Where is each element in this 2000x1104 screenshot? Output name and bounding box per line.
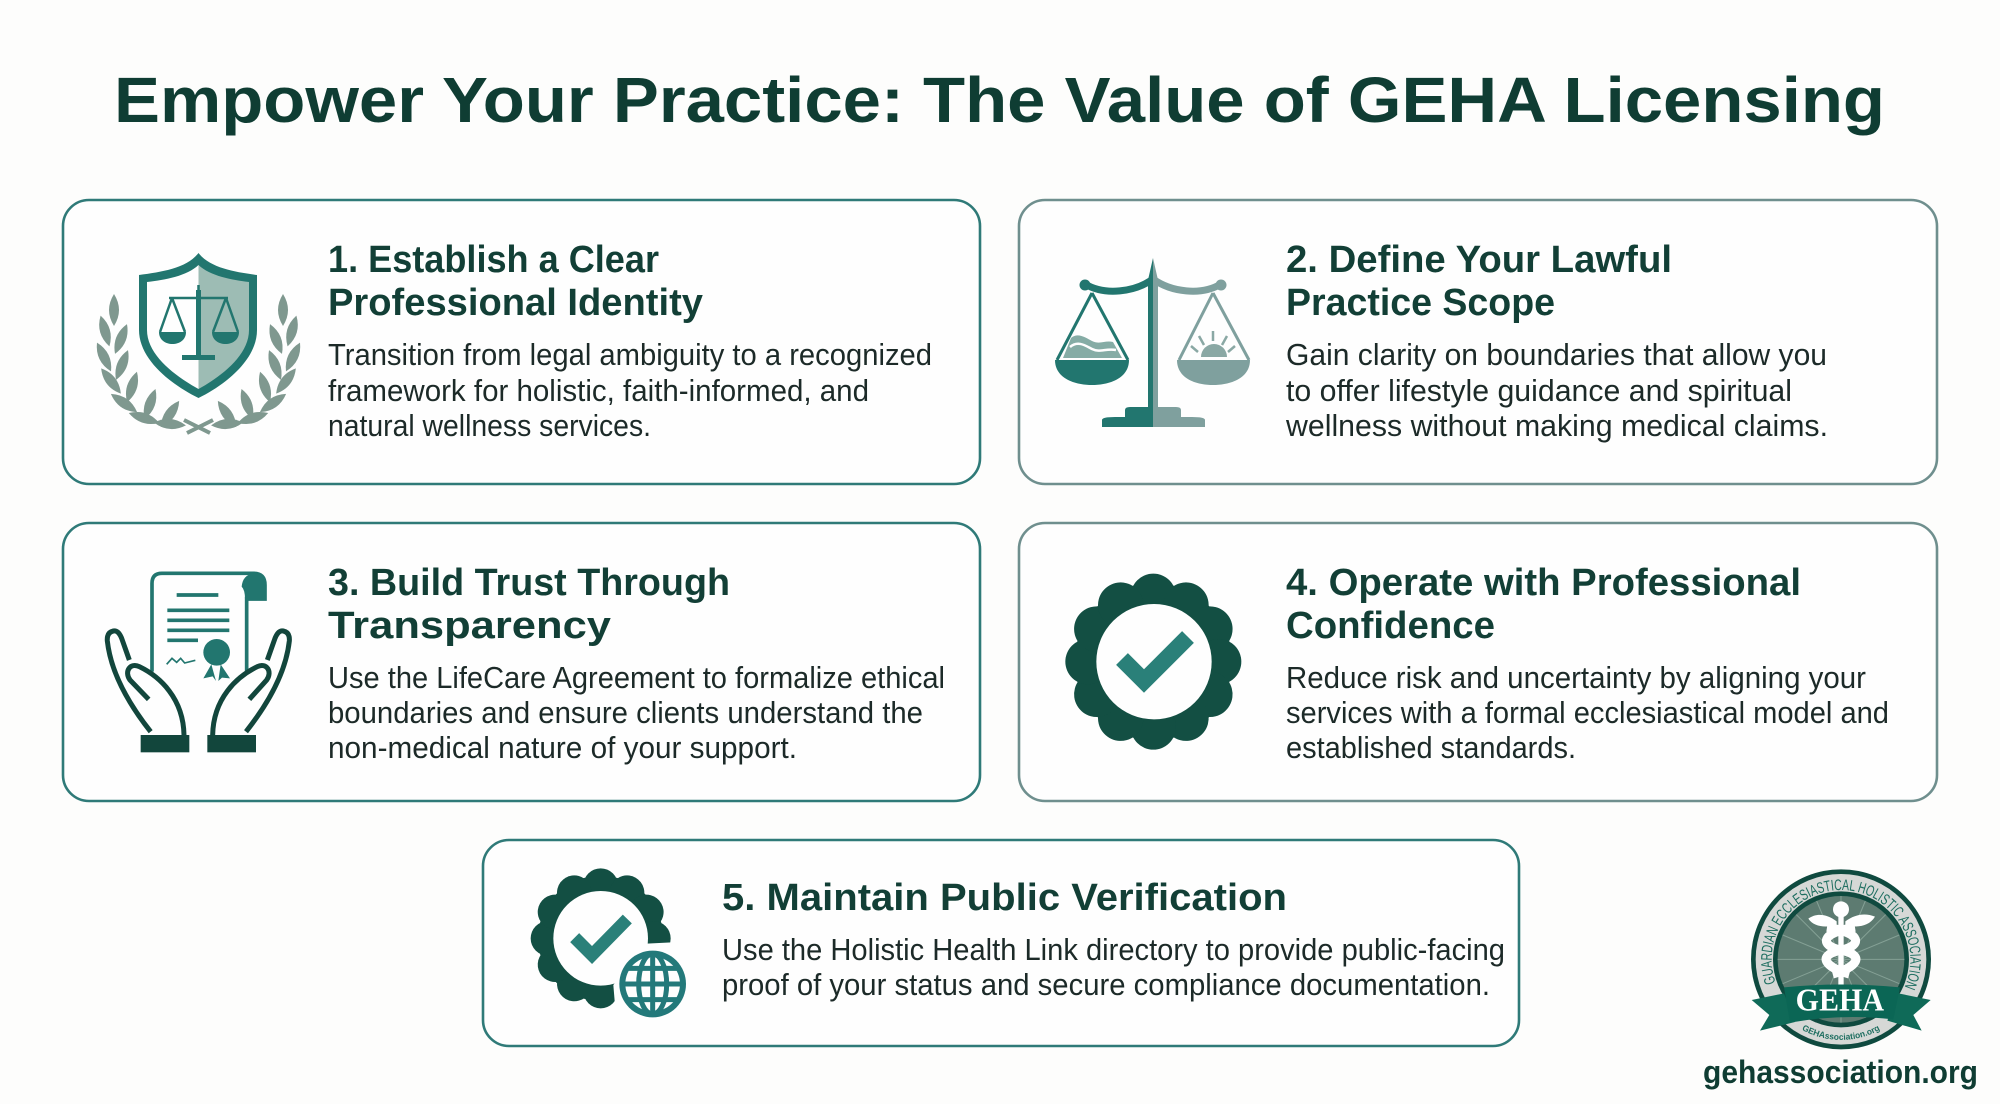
- body text: [1286, 660, 1889, 765]
- body text: natural wellness services.: [328, 408, 651, 443]
- body text: [1285, 337, 1828, 443]
- seal ribbon: [1752, 984, 1931, 1031]
- icon: gear check with globe: [531, 868, 687, 1025]
- logo: GEHA seal: [1751, 869, 1931, 1050]
- panel: 4. professional confidence: [1019, 523, 1937, 801]
- heading: 5. Maintain Public Verification: [722, 877, 1287, 919]
- heading: 3. Build Trust Through: [328, 562, 730, 604]
- seal wordmark: GEHA: [1796, 982, 1884, 1018]
- heading: [328, 239, 703, 324]
- body text: to offer lifestyle guidance and spiritual: [1286, 373, 1792, 408]
- heading: Confidence: [1286, 605, 1495, 647]
- website address: gehassociation.org: [1703, 1054, 1978, 1090]
- body text: Use the LifeCare Agreement to formalize ethical: [328, 660, 945, 695]
- icon: balance scales: [1055, 258, 1250, 427]
- heading: [1286, 562, 1801, 647]
- panel: 3. trust through transparency: [63, 523, 980, 801]
- body text: [722, 932, 1505, 1002]
- heading: [1286, 239, 1672, 324]
- title: Empower Your Practice: The Value of GEHA Licensing: [114, 64, 1885, 136]
- body text: wellness without making medical claims.: [1285, 408, 1828, 443]
- heading: Practice Scope: [1286, 282, 1555, 324]
- panel: 2. lawful practice scope: [1019, 200, 1937, 484]
- body text: non-medical nature of your support.: [328, 730, 797, 765]
- seal web address: GEHAssociation.org: [1802, 1025, 1880, 1040]
- body text: Gain clarity on boundaries that allow you: [1286, 337, 1827, 372]
- body text: [328, 337, 932, 443]
- heading: 1. Establish a Clear: [328, 239, 659, 281]
- panel: 5. public verification: [483, 840, 1519, 1046]
- icon: shield with scales and laurel: [92, 253, 305, 433]
- body text: Reduce risk and uncertainty by aligning your: [1286, 660, 1866, 695]
- body text: services with a formal ecclesiastical model and: [1286, 695, 1889, 730]
- body text: Use the Holistic Health Link directory to provide public-facing: [722, 932, 1505, 967]
- seal ring text: GUARDIAN ECCLESIASTICAL HOLISTIC ASSOCIATION: [1761, 879, 1921, 990]
- body text: proof of your status and secure compliance documentation.: [722, 967, 1490, 1002]
- body text: Transition from legal ambiguity to a recognized: [328, 337, 932, 372]
- body text: boundaries and ensure clients understand the: [328, 695, 923, 730]
- panel: 1. clear professional identity: [63, 200, 980, 484]
- heading: Transparency: [328, 605, 611, 647]
- body text: [328, 660, 945, 765]
- body text: framework for holistic, faith-informed, and: [328, 373, 869, 408]
- body text: established standards.: [1286, 730, 1576, 765]
- heading: 4. Operate with Professional: [1286, 562, 1801, 604]
- heading: 2. Define Your Lawful: [1286, 239, 1672, 281]
- heading: Professional Identity: [328, 282, 703, 324]
- icon: hands holding certificate: [107, 573, 289, 752]
- icon: seal with check mark: [1065, 574, 1241, 750]
- heading: [328, 562, 730, 647]
- caduceus: [1808, 901, 1875, 985]
